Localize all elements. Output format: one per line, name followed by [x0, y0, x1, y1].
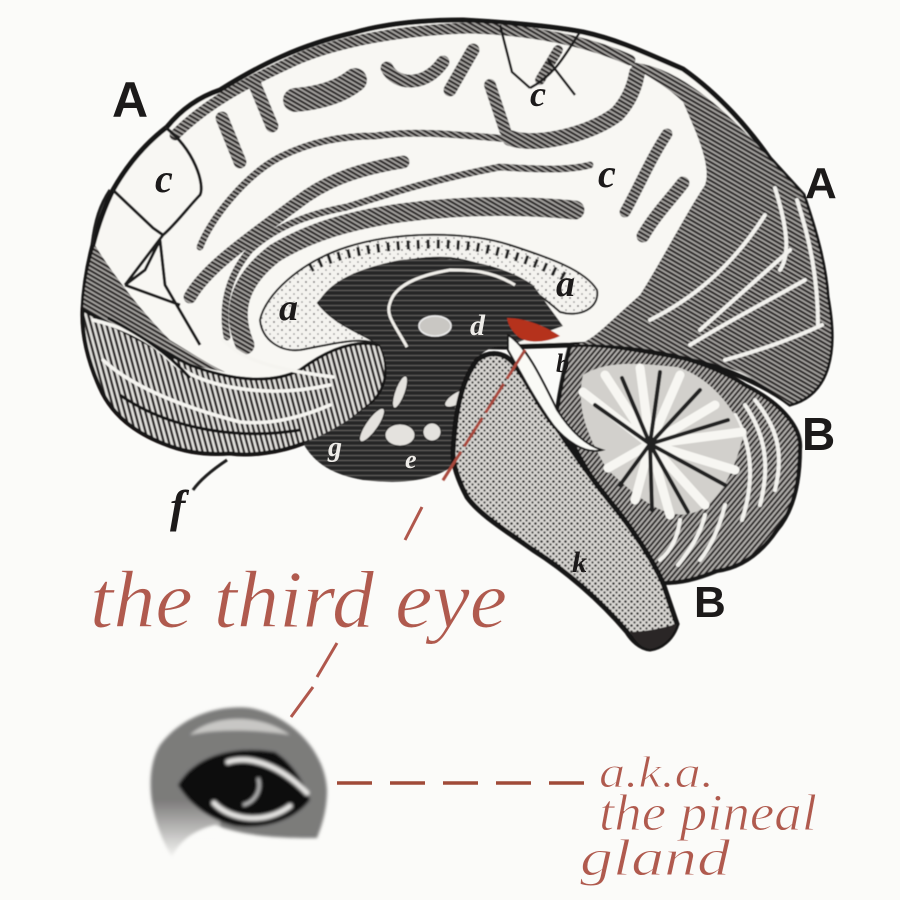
- letter labels: a: [279, 287, 298, 329]
- letter labels: c: [598, 151, 616, 196]
- white lines on back of brain: [650, 188, 822, 360]
- dashed line: eye to caption: [337, 781, 585, 785]
- caption: a.k.a. the pineal gland: the pineal: [599, 785, 817, 842]
- cerebrum: [83, 20, 831, 454]
- cerebellum: [557, 344, 800, 583]
- eye dome: [151, 707, 327, 857]
- callosum striations: [310, 244, 570, 280]
- letter labels: A: [805, 159, 837, 208]
- pineal gland: [507, 318, 560, 342]
- letter labels: [112, 72, 837, 627]
- title: the third eye: the third eye: [90, 554, 507, 645]
- thalamus white outline: [389, 270, 515, 347]
- brain illustration: [83, 20, 831, 649]
- dashed line: gland to eye: [291, 507, 422, 717]
- letter labels: B: [694, 578, 726, 627]
- gyrus outlines, frontal: [92, 127, 201, 345]
- cheek fade: [150, 800, 220, 860]
- letter labels: g: [327, 432, 342, 463]
- caption: a.k.a. the pineal gland: [580, 748, 817, 887]
- cerebellum arbor: [581, 364, 743, 514]
- letter labels: b: [556, 349, 569, 378]
- hatched sulci, top and frontal: [175, 28, 683, 345]
- letter labels: B: [802, 408, 835, 460]
- brain stem: [453, 354, 677, 649]
- stem cut end: [630, 624, 677, 649]
- letter labels: c: [530, 74, 546, 114]
- corpus callosum: [260, 235, 597, 350]
- letter labels: A: [112, 72, 148, 128]
- letter labels: f: [170, 481, 190, 532]
- hatched lower frontal lobes: [83, 310, 386, 454]
- eye socket: [178, 750, 310, 827]
- lower lobe gyri lines: [93, 320, 333, 423]
- hatched front left wedge: [83, 245, 225, 372]
- letter labels: e: [405, 445, 417, 474]
- red tract line in stem: [440, 350, 525, 485]
- letter labels: d: [470, 309, 486, 342]
- caption: a.k.a. the pineal gland: a.k.a.: [599, 748, 714, 797]
- hatched region, back of brain: [570, 62, 831, 404]
- top gyri lines: [500, 25, 580, 95]
- eye dome highlight: [190, 719, 290, 735]
- optic tail f: [193, 460, 227, 490]
- optic structures: [356, 374, 474, 446]
- iris: [243, 778, 259, 805]
- letter labels: c: [155, 156, 173, 201]
- cerebellum folia: [660, 400, 779, 565]
- letter labels: k: [572, 546, 587, 579]
- white canal: [508, 335, 602, 451]
- eye engraving: [150, 707, 327, 860]
- dark ventricle and diencephalon: [303, 258, 563, 482]
- eyelids: [214, 760, 307, 818]
- stippled thalamus: [419, 316, 451, 336]
- caption: a.k.a. the pineal gland: gland: [580, 830, 731, 887]
- letter labels: a: [556, 263, 575, 305]
